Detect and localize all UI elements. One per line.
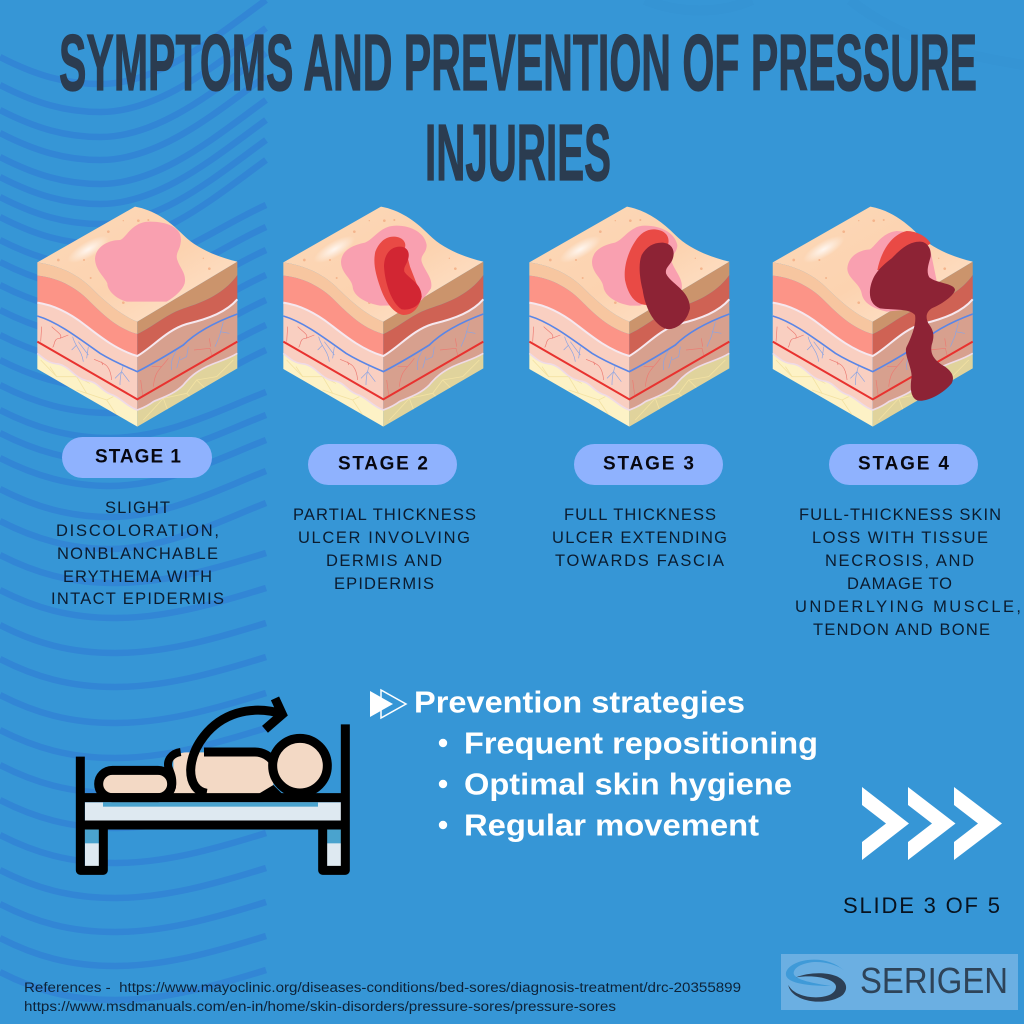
icon: next chevrons [862,787,1002,860]
bed frame [80,724,345,870]
stage 1 description: SLIGHT [105,499,170,517]
stage 3 label pill: STAGE 3 [603,454,694,474]
stage 3 skin illustration [529,207,729,427]
stage 2 label pill [308,444,457,485]
stage 2 description: DERMIS AND [326,552,442,570]
prevention strategies list: Optimal skin hygiene [464,766,792,802]
references [24,980,741,1014]
stage 2 description: ULCER INVOLVING [298,529,470,547]
stage 3 description: FULL THICKNESS [564,506,716,524]
title: INJURIES [425,108,611,197]
slide counter: SLIDE 3 OF 5 [843,893,1000,918]
stage 2 description [293,506,476,593]
stage 1 description [51,499,224,608]
patient body [99,738,327,798]
stage 1 description: INTACT EPIDERMIS [51,590,224,608]
logo: Serigen [781,954,1018,1010]
stage 4 description [795,506,1021,639]
stage 4 skin illustration [773,207,973,427]
stage 1 label pill: STAGE 1 [95,446,181,468]
stage 4 label pill [829,444,978,485]
stage 1 description: DISCOLORATION, [56,522,219,540]
turning arrow [191,698,283,793]
prevention strategies list [414,684,818,842]
stage 4 description: UNDERLYING MUSCLE, [795,598,1021,616]
stage 3 description [552,506,727,570]
stage 4 description: TENDON AND BONE [813,621,990,639]
stage 4 description: DAMAGE TO [847,575,952,593]
stage 2 description: EPIDERMIS [334,575,434,593]
stage 3 description: TOWARDS FASCIA [555,552,724,570]
icon: double play arrow [370,690,406,718]
stage 3 description: ULCER EXTENDING [552,529,727,547]
background swirl: top right [645,0,1024,65]
references: References - https://www.mayoclinic.org/diseases-conditions/bed-sores/diagnosis-treatment/drc-20355899 [24,980,741,995]
logo swirl [786,960,846,1002]
prevention strategies list: Regular movement [464,808,759,842]
title [59,18,977,197]
stage 1 description: ERYTHEMA WITH [63,568,212,586]
prevention strategies list: Prevention strategies [414,684,745,720]
bed mattress [85,802,341,866]
icon: patient repositioning in bed [80,698,345,870]
stage 4 label pill: STAGE 4 [858,454,949,474]
background wave pattern: left strip [0,0,266,1000]
references: https://www.msdmanuals.com/en-in/home/skin-disorders/pressure-sores/pressure-sores [24,999,616,1014]
stage 2 label pill: STAGE 2 [338,454,428,474]
stage 2 description: PARTIAL THICKNESS [293,506,476,524]
stage 4 description: FULL-THICKNESS SKIN [799,506,1001,524]
stage 4 description: LOSS WITH TISSUE [812,529,988,547]
stage 1 skin illustration [37,207,237,427]
stage 2 skin illustration [283,207,483,427]
prevention strategies list: Frequent repositioning [464,726,818,760]
logo: Serigen: SERIGEN [860,960,1008,1001]
stage 3 label pill [574,444,723,485]
stage 4 description: NECROSIS, AND [825,552,974,570]
stage 1 label pill [62,437,212,478]
stage 1 description: NONBLANCHABLE [57,545,218,563]
